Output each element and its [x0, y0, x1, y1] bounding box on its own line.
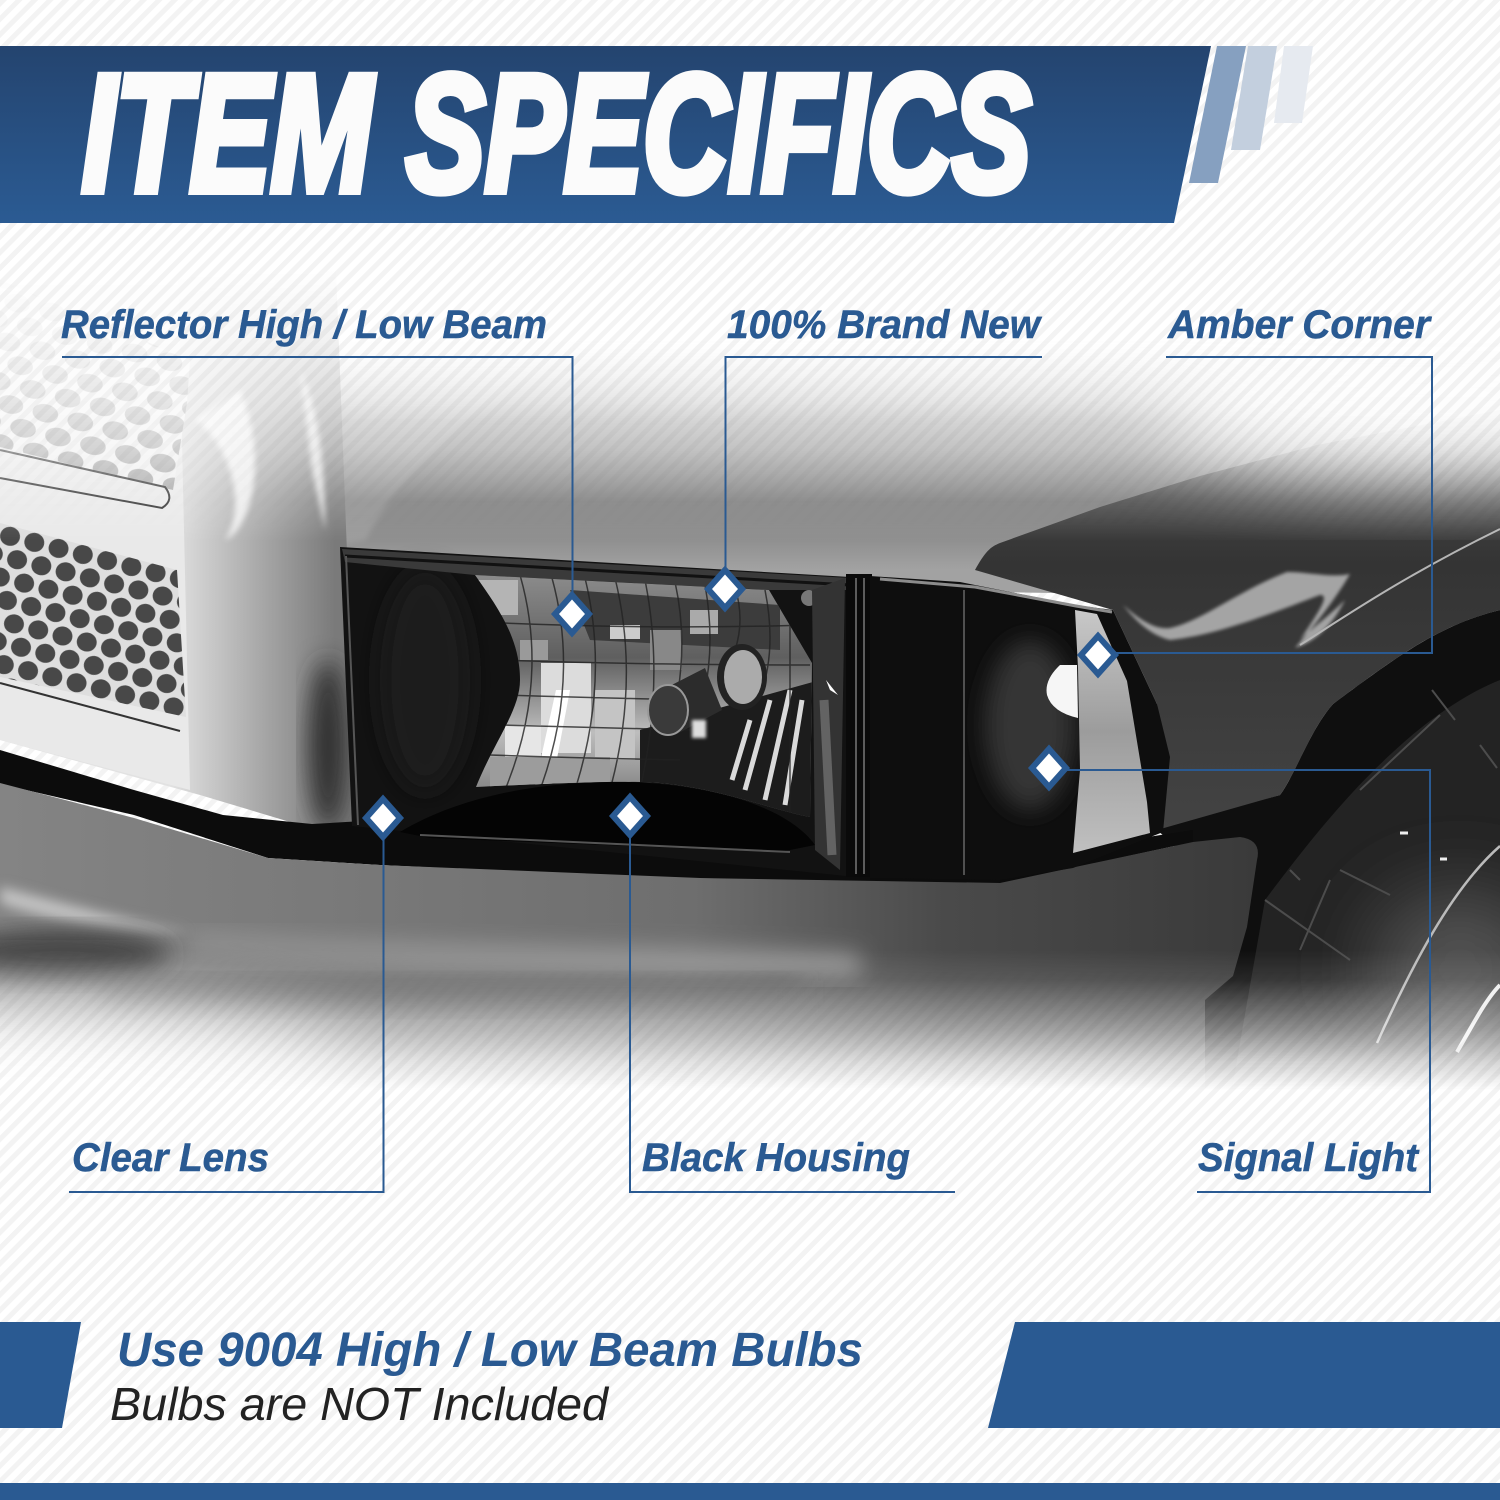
chrome bar line: [0, 450, 169, 508]
bright tiles: [541, 663, 591, 753]
title: SPECIFICS: [406, 42, 1031, 226]
vehicle photo: [0, 270, 1500, 1110]
fender crease: [1300, 529, 1500, 645]
housing soft reflection: [380, 570, 470, 790]
grille left chrome: [172, 459, 190, 790]
fender: [975, 410, 1500, 831]
bottom right bar: [988, 1322, 1500, 1428]
marker diamond: [613, 797, 647, 835]
bottom left bar: [0, 1322, 81, 1428]
corner lens: [1073, 610, 1150, 853]
grille chrome surround: [4, 315, 352, 824]
rear bulb face: [724, 650, 762, 704]
marker diamond: [555, 595, 589, 633]
bumper mid band: [190, 935, 860, 975]
housing: [340, 547, 850, 876]
corner housing: [870, 576, 1170, 880]
marker diamond: [366, 799, 400, 837]
lower grille: [0, 523, 186, 717]
corner bulb glint: [1047, 665, 1078, 718]
label: Black Housing: Black Housing: [642, 1136, 910, 1180]
hood panel: [340, 369, 1382, 593]
title accent stripes: [1189, 46, 1313, 183]
footer bar: [0, 1483, 1500, 1500]
bumper highlight: [0, 887, 190, 932]
tire tread marks: [1265, 690, 1497, 960]
dark reflector zones: [640, 680, 820, 820]
reflector: [470, 570, 820, 820]
car body with fade: [0, 270, 1500, 1110]
bulb highlight: [692, 720, 706, 738]
tire glints: [1400, 833, 1447, 859]
chrome white folds: [195, 390, 255, 540]
front bulb: [648, 685, 688, 735]
housing side trim: [346, 556, 358, 825]
reflector grid: [490, 577, 810, 796]
upper grille: [0, 280, 190, 490]
bulb note heading: Use 9004 High / Low Beam Bulbs: [117, 1324, 863, 1377]
corner lamp: [870, 576, 1170, 880]
bumper dark lower: [100, 980, 800, 1010]
mounting post: [801, 590, 817, 606]
corner reflection: [985, 640, 1075, 810]
wheel well: [1157, 610, 1500, 1100]
marker diamond: [1081, 636, 1115, 674]
tire lighter lower: [1370, 890, 1500, 1050]
bumper dark lower left: [0, 931, 170, 979]
lower seal line: [420, 835, 790, 852]
chrome upper fold: [300, 370, 325, 530]
leader: Amber Corner: [1115, 357, 1432, 653]
leader: Clear Lens: [69, 835, 384, 1192]
leader: Black Housing: [630, 835, 955, 1192]
leader: Reflector High / Low Beam: [62, 357, 572, 600]
corner centre seam: [963, 590, 965, 875]
upper light tiles: [478, 580, 518, 615]
housing top seal: [342, 549, 850, 590]
black trim strip: [0, 750, 1193, 884]
title band: [0, 42, 1211, 226]
rear bulb: [717, 644, 767, 710]
label: Signal Light: Signal Light: [1198, 1136, 1420, 1180]
wheel arcs: [1377, 846, 1500, 1043]
tire: [1241, 680, 1500, 1039]
marker diamond: [708, 570, 742, 608]
lower bar line: [0, 683, 180, 731]
leader: 100% Brand New: [726, 357, 1042, 575]
label: 100% Brand New: 100% Brand New: [727, 303, 1043, 347]
bulb note subtext: Bulbs are NOT Included: [110, 1378, 609, 1430]
corner top trim: [880, 579, 1112, 612]
title: ITEM: [82, 42, 375, 226]
reflector base: [470, 570, 815, 820]
bulb barrel: [658, 668, 722, 735]
light streaks: [732, 690, 802, 805]
label: Reflector High / Low Beam: Reflector High / Low Beam: [61, 303, 547, 347]
leader: Signal Light: [1065, 770, 1430, 1192]
bumper: [0, 783, 1258, 1110]
chrome dark corner: [308, 660, 348, 830]
hood light contour: [344, 456, 421, 542]
label: Amber Corner: Amber Corner: [1167, 303, 1432, 347]
main headlight: [340, 547, 850, 876]
fender highlight: [1123, 572, 1350, 648]
title: [82, 42, 1031, 226]
clear strip: [812, 578, 845, 870]
label: Clear Lens: Clear Lens: [72, 1136, 269, 1180]
marker diamond: [1032, 749, 1066, 787]
lower dark housing: [400, 782, 815, 852]
lamp divider: [846, 574, 872, 877]
